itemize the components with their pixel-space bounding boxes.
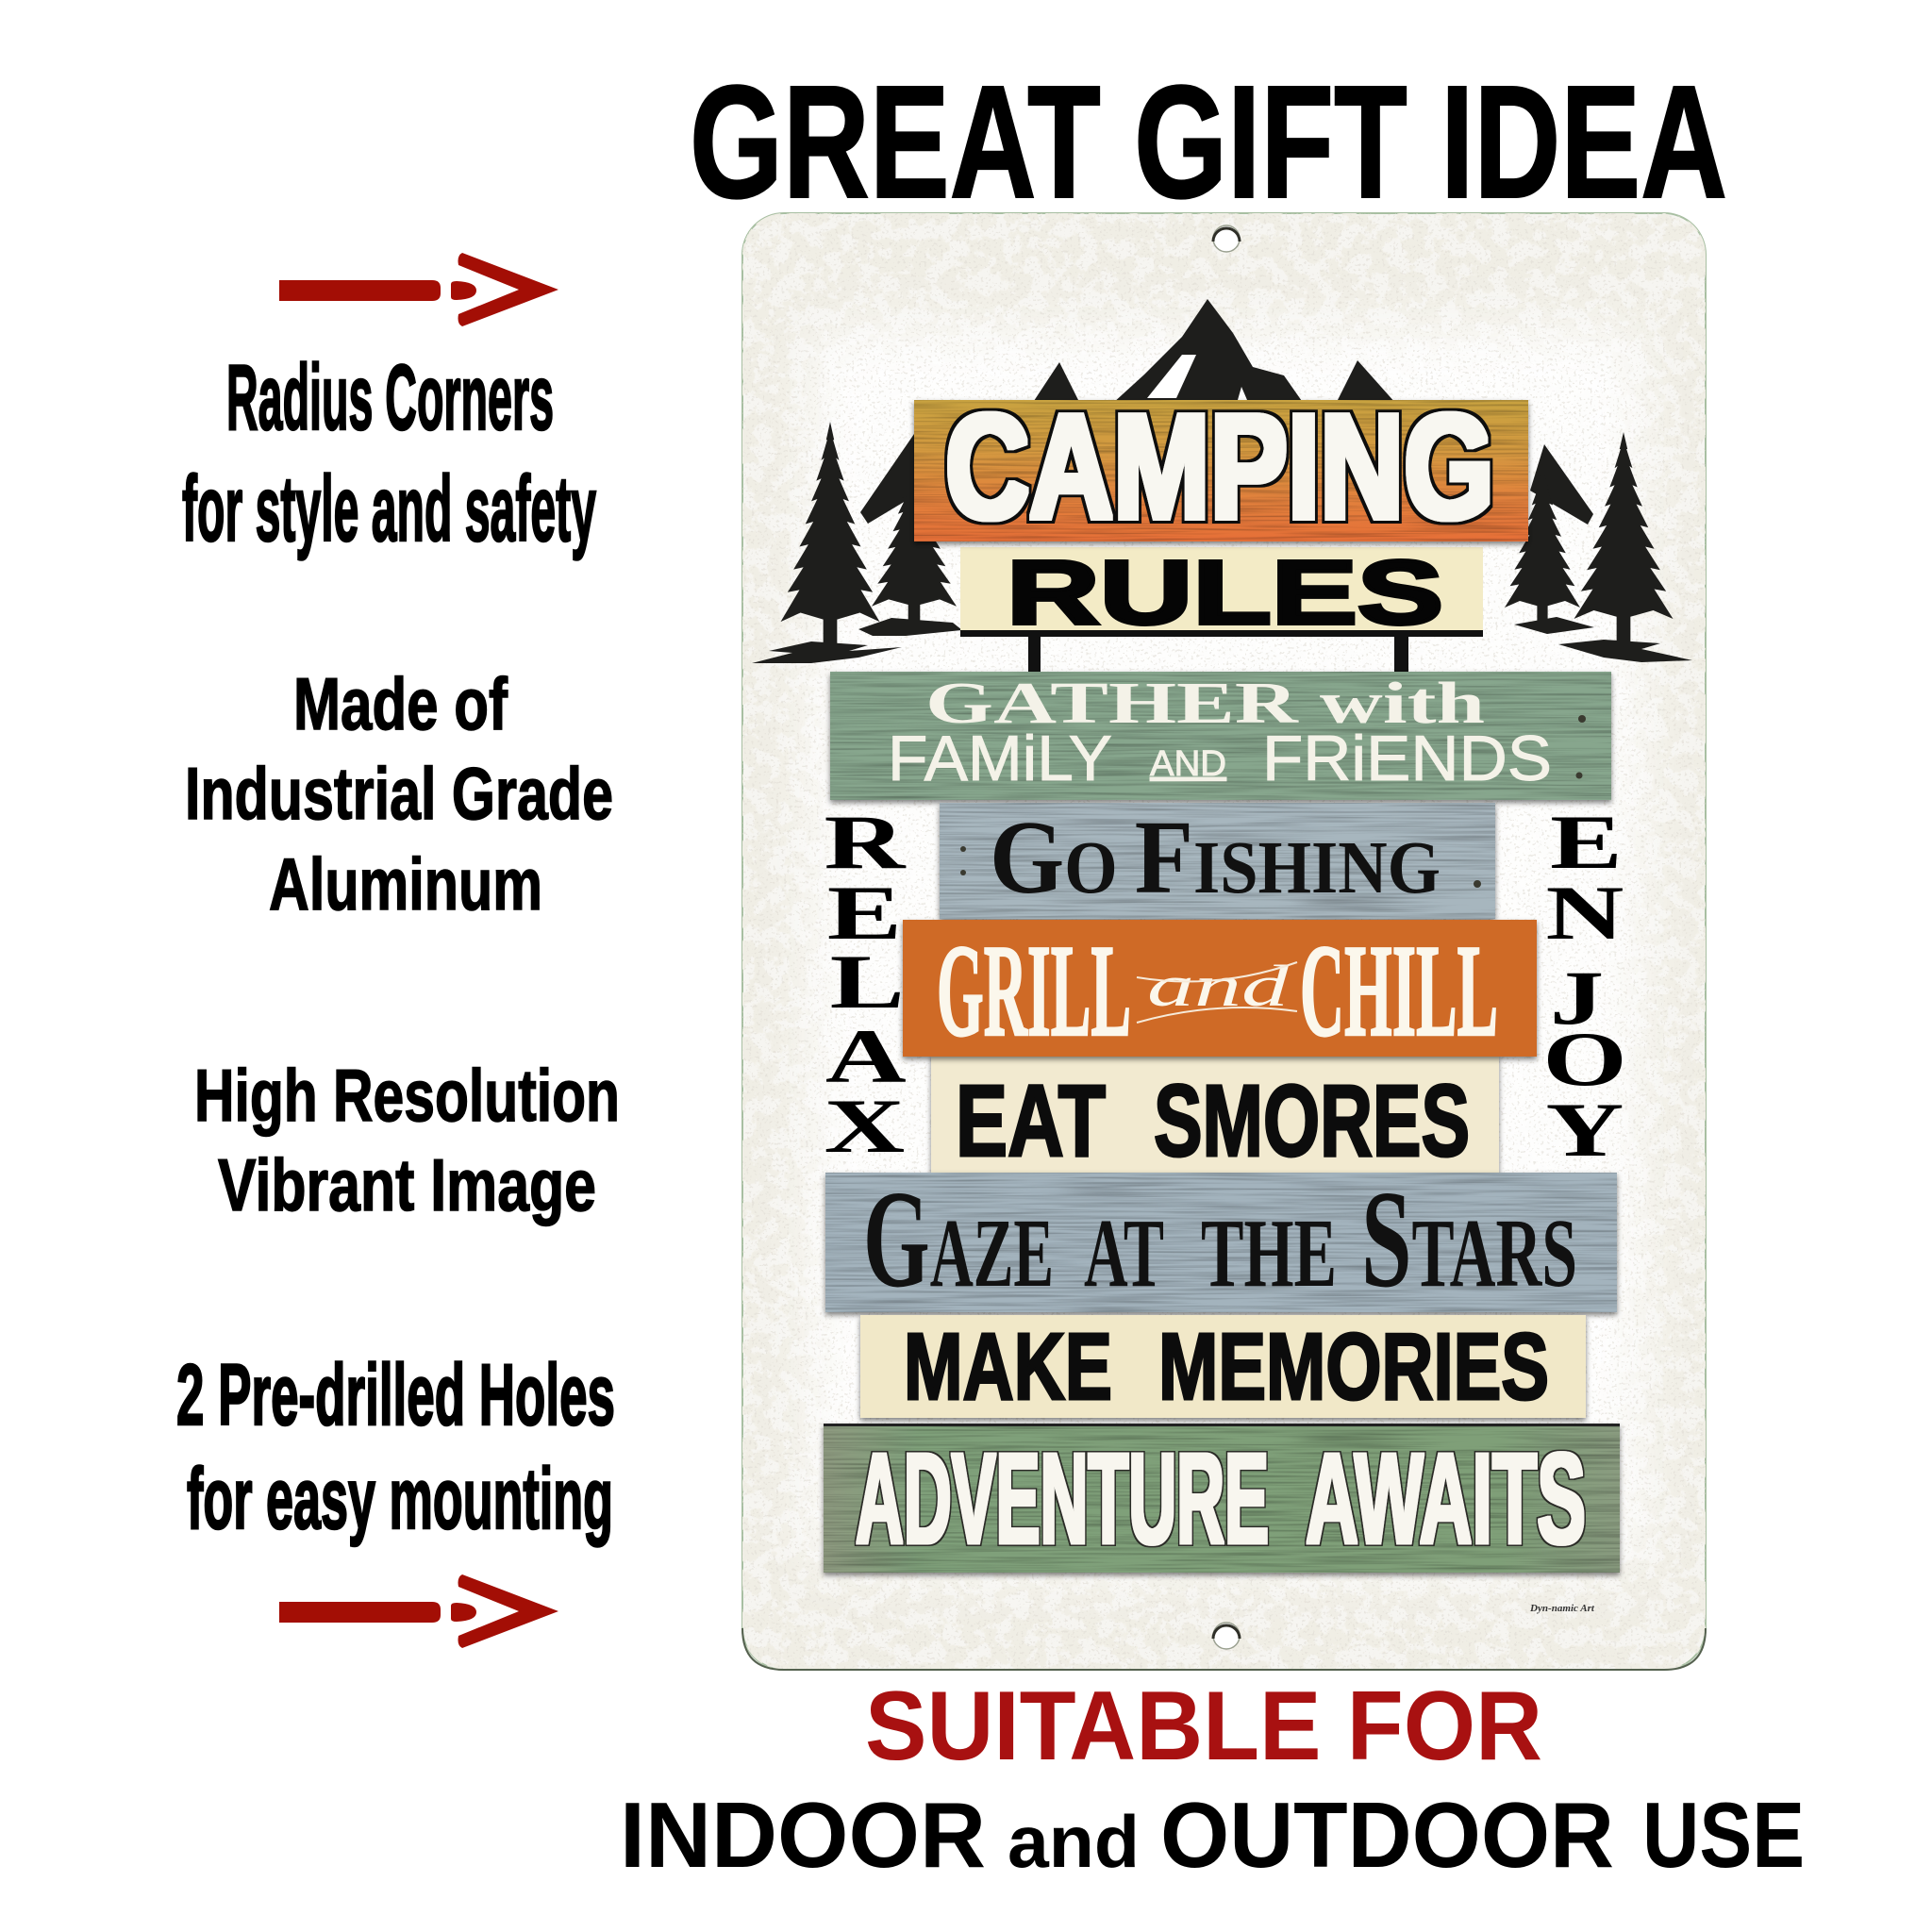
- heading: indoor and outdoor use: [620, 1783, 1805, 1887]
- text block: high resolution image: [194, 1054, 620, 1226]
- plank: grill and chill: [903, 918, 1537, 1064]
- sign post: right: [1394, 634, 1408, 674]
- heading: indoor and outdoor use: INDOOR: [620, 1783, 986, 1887]
- text: enjoy vertical: ENJOY: [1542, 799, 1627, 1173]
- icon: pine trees: [752, 422, 1692, 663]
- text block: radius corners: [182, 345, 596, 560]
- icon: red arrow top: [279, 253, 558, 326]
- plank: gaze at the stars: [825, 1162, 1617, 1317]
- icon: top mounting hole: [1213, 225, 1240, 252]
- plank: gaze at the stars: STARS: [1361, 1162, 1577, 1317]
- plank: gather with family and friends: AND: [1150, 744, 1226, 784]
- infographic: camping rules gift sign: [177, 84, 1802, 1868]
- plank: eat smores: [931, 1054, 1499, 1179]
- text: artist credit: Dyn-namic Art: [1529, 1603, 1595, 1614]
- text block: high resolution image: High Resolution: [194, 1054, 620, 1137]
- plank: rules: [960, 542, 1483, 643]
- text: relax vertical: RELAX: [824, 800, 907, 1169]
- plank: grill and chill: and: [1147, 955, 1291, 1019]
- plank: make memories: [860, 1314, 1586, 1420]
- plank: gather with family and friends: [830, 672, 1611, 800]
- sign post: left: [1028, 634, 1041, 674]
- plank: grill and chill: GRILL: [937, 918, 1131, 1064]
- plank: gather with family and friends: FAMiLY: [888, 723, 1112, 794]
- text block: radius corners: Radius Corners: [226, 345, 554, 449]
- heading: indoor and outdoor use: OUTDOOR: [1160, 1783, 1614, 1887]
- plank: adventure awaits: AWAITS: [1306, 1426, 1586, 1572]
- text block: high resolution image: Vibrant Image: [218, 1143, 596, 1226]
- text block: made of aluminum: [185, 662, 613, 925]
- plank: gaze at the stars: THE: [1201, 1199, 1337, 1307]
- icon: bottom mounting hole: [1213, 1623, 1240, 1649]
- text block: made of aluminum: Industrial Grade: [185, 752, 613, 835]
- plank: eat smores: EAT: [956, 1063, 1106, 1177]
- heading: suitable for: SUITABLE FOR: [865, 1672, 1542, 1781]
- plank: make memories: MAKE: [904, 1314, 1112, 1420]
- text block: pre-drilled holes: 2 Pre-drilled Holes: [176, 1347, 615, 1443]
- text block: made of aluminum: Aluminum: [269, 842, 542, 925]
- text block: pre-drilled holes: [176, 1347, 615, 1547]
- plank: gather with family and friends: FRiENDS: [1262, 723, 1552, 794]
- text block: made of aluminum: Made of: [293, 662, 508, 745]
- infographic: camping rules gift sign: for style and safety: [182, 457, 596, 560]
- plank: gather with family and friends: GATHER with: [925, 672, 1485, 736]
- heading: indoor and outdoor use: and: [1008, 1800, 1140, 1883]
- plank: go fishing: GO FISHING: [990, 800, 1441, 916]
- panel: metal sign: [742, 213, 1706, 1670]
- plank: camping: CAMPING: [945, 384, 1494, 550]
- plank: gaze at the stars: AT: [1084, 1199, 1164, 1307]
- plank: adventure awaits: ADVENTURE: [856, 1426, 1269, 1572]
- text block: pre-drilled holes: for easy mounting: [187, 1451, 613, 1547]
- plank: grill and chill: CHILL: [1300, 918, 1498, 1064]
- icon: red arrow bottom: [279, 1574, 558, 1648]
- plank: gaze at the stars: GAZE: [863, 1162, 1054, 1317]
- plank: eat smores: SMORES: [1154, 1063, 1470, 1177]
- icon: mountains: [860, 299, 1593, 525]
- heading: indoor and outdoor use: USE: [1642, 1783, 1805, 1887]
- plank: make memories: MEMORIES: [1158, 1314, 1549, 1420]
- plank: rules: RULES: [1007, 542, 1443, 643]
